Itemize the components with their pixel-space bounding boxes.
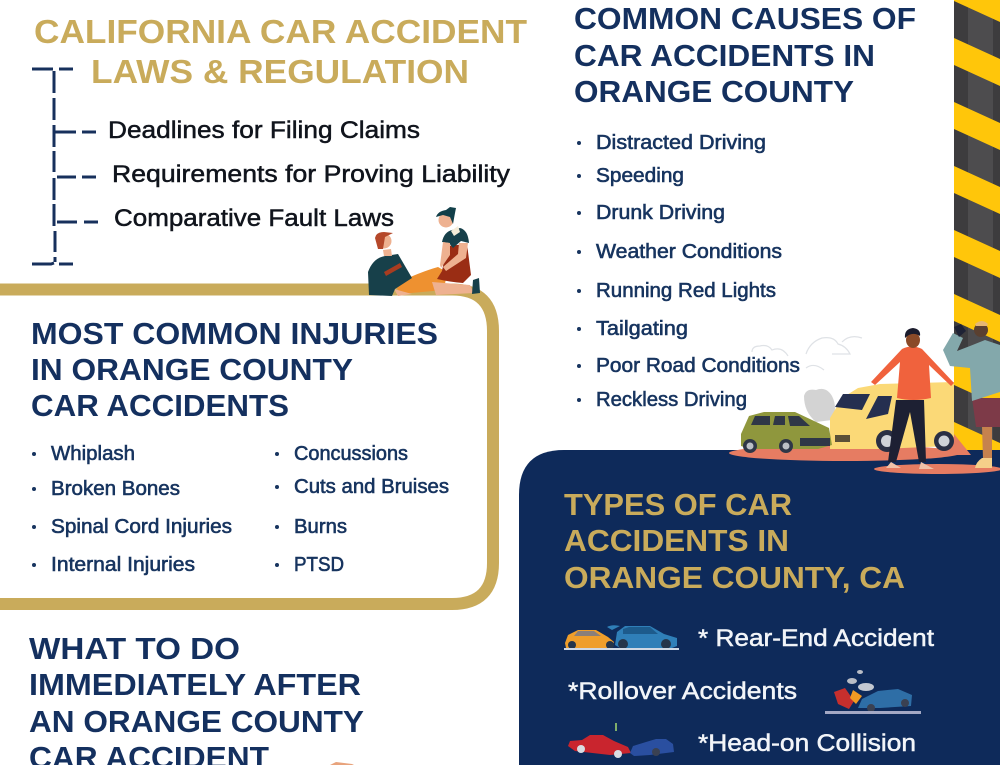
- list: injuries right column: Burns: [294, 516, 347, 538]
- item: rear-end accident: [564, 625, 934, 652]
- item: rollover accidents: [568, 670, 921, 714]
- panel: hazard stripe column: [954, 0, 1000, 470]
- panel: what to do immediately: [29, 632, 364, 765]
- list: injuries right column: PTSD: [294, 554, 344, 576]
- panel: most common injuries: [0, 290, 493, 604]
- list: injuries left column: Spinal Cord Injuries: [51, 516, 232, 538]
- list: causes: [577, 132, 800, 411]
- heading: common causes: CAR ACCIDENTS IN: [574, 39, 875, 73]
- list: injuries right column: Cuts and Bruises: [294, 476, 449, 498]
- list: causes: Poor Road Conditions: [596, 355, 800, 377]
- heading: common causes: COMMON CAUSES OF: [574, 2, 916, 36]
- green car: [741, 412, 832, 453]
- heading: most common injuries: [31, 317, 438, 423]
- panel: California laws and regulation: [32, 14, 528, 264]
- text: laws list: Deadlines for Filing Claims: [108, 117, 420, 144]
- yellow van: [830, 382, 954, 452]
- icon: dashed bracket tree: [32, 69, 98, 264]
- illustration: woman tending injured man: [368, 207, 480, 296]
- illustration: roadside crash scene: [729, 321, 1000, 474]
- person with orange shirt: [871, 328, 1000, 474]
- heading: most common injuries: CAR ACCIDENTS: [31, 389, 289, 423]
- panel: common causes: [574, 2, 916, 411]
- list: causes: Reckless Driving: [596, 389, 747, 411]
- list: causes: Drunk Driving: [596, 202, 725, 224]
- list: causes: Weather Conditions: [596, 241, 782, 263]
- text: laws list: [108, 117, 511, 232]
- text: laws list: Comparative Fault Laws: [114, 205, 394, 232]
- heading: types of accidents: TYPES OF CAR: [564, 488, 792, 522]
- icon: partial illustration top: [330, 762, 354, 765]
- heading: most common injuries: MOST COMMON INJURIES: [31, 317, 438, 351]
- heading: common causes: [574, 2, 916, 109]
- list: injuries left column: Whiplash: [51, 443, 135, 465]
- heading: what to do: AN ORANGE COUNTY: [29, 705, 364, 739]
- panel: types of car accidents: [519, 450, 1000, 765]
- navy background: [519, 450, 1000, 765]
- list: causes: Tailgating: [596, 318, 688, 340]
- icon: rear-end cars: [564, 625, 679, 650]
- heading: most common injuries: IN ORANGE COUNTY: [31, 353, 353, 387]
- smoke and clouds: [752, 337, 862, 370]
- salmon ground ellipses: [729, 445, 961, 461]
- heading: types of accidents: [564, 488, 905, 595]
- heading: types of accidents: ORANGE COUNTY, CA: [564, 561, 905, 595]
- heading: types of accidents: ACCIDENTS IN: [564, 524, 789, 558]
- icon: rollover crash: [825, 670, 921, 714]
- icon: head-on crash: [568, 723, 674, 758]
- list: injuries left column: Broken Bones: [51, 478, 180, 500]
- list: causes: Distracted Driving: [596, 132, 766, 154]
- item: head-on collision: *Head-on Collision: [698, 730, 916, 757]
- person with phone: [943, 321, 1000, 468]
- list: injuries left column: Internal Injuries: [51, 554, 195, 576]
- list: causes: Running Red Lights: [596, 280, 776, 302]
- item: rear-end accident: * Rear-End Accident: [698, 625, 934, 652]
- item: head-on collision: [568, 723, 916, 758]
- list: causes: Speeding: [596, 165, 684, 187]
- item: rollover accidents: *Rollover Accidents: [568, 678, 797, 705]
- list: injuries right column: [275, 443, 449, 576]
- warning triangle: [944, 434, 971, 455]
- title: California car accident laws: LAWS & REGULATION: [91, 54, 469, 91]
- title: California car accident laws: [34, 14, 528, 91]
- list: injuries left column: [32, 443, 232, 576]
- list: injuries right column: Concussions: [294, 443, 408, 465]
- title: California car accident laws: CALIFORNIA CAR ACCIDENT: [34, 14, 528, 51]
- heading: what to do: IMMEDIATELY AFTER: [29, 668, 361, 702]
- gold rounded frame: [0, 290, 493, 604]
- heading: common causes: ORANGE COUNTY: [574, 75, 854, 109]
- heading: what to do: WHAT TO DO: [29, 632, 240, 666]
- heading: what to do: [29, 632, 364, 765]
- text: laws list: Requirements for Proving Liability: [112, 161, 511, 188]
